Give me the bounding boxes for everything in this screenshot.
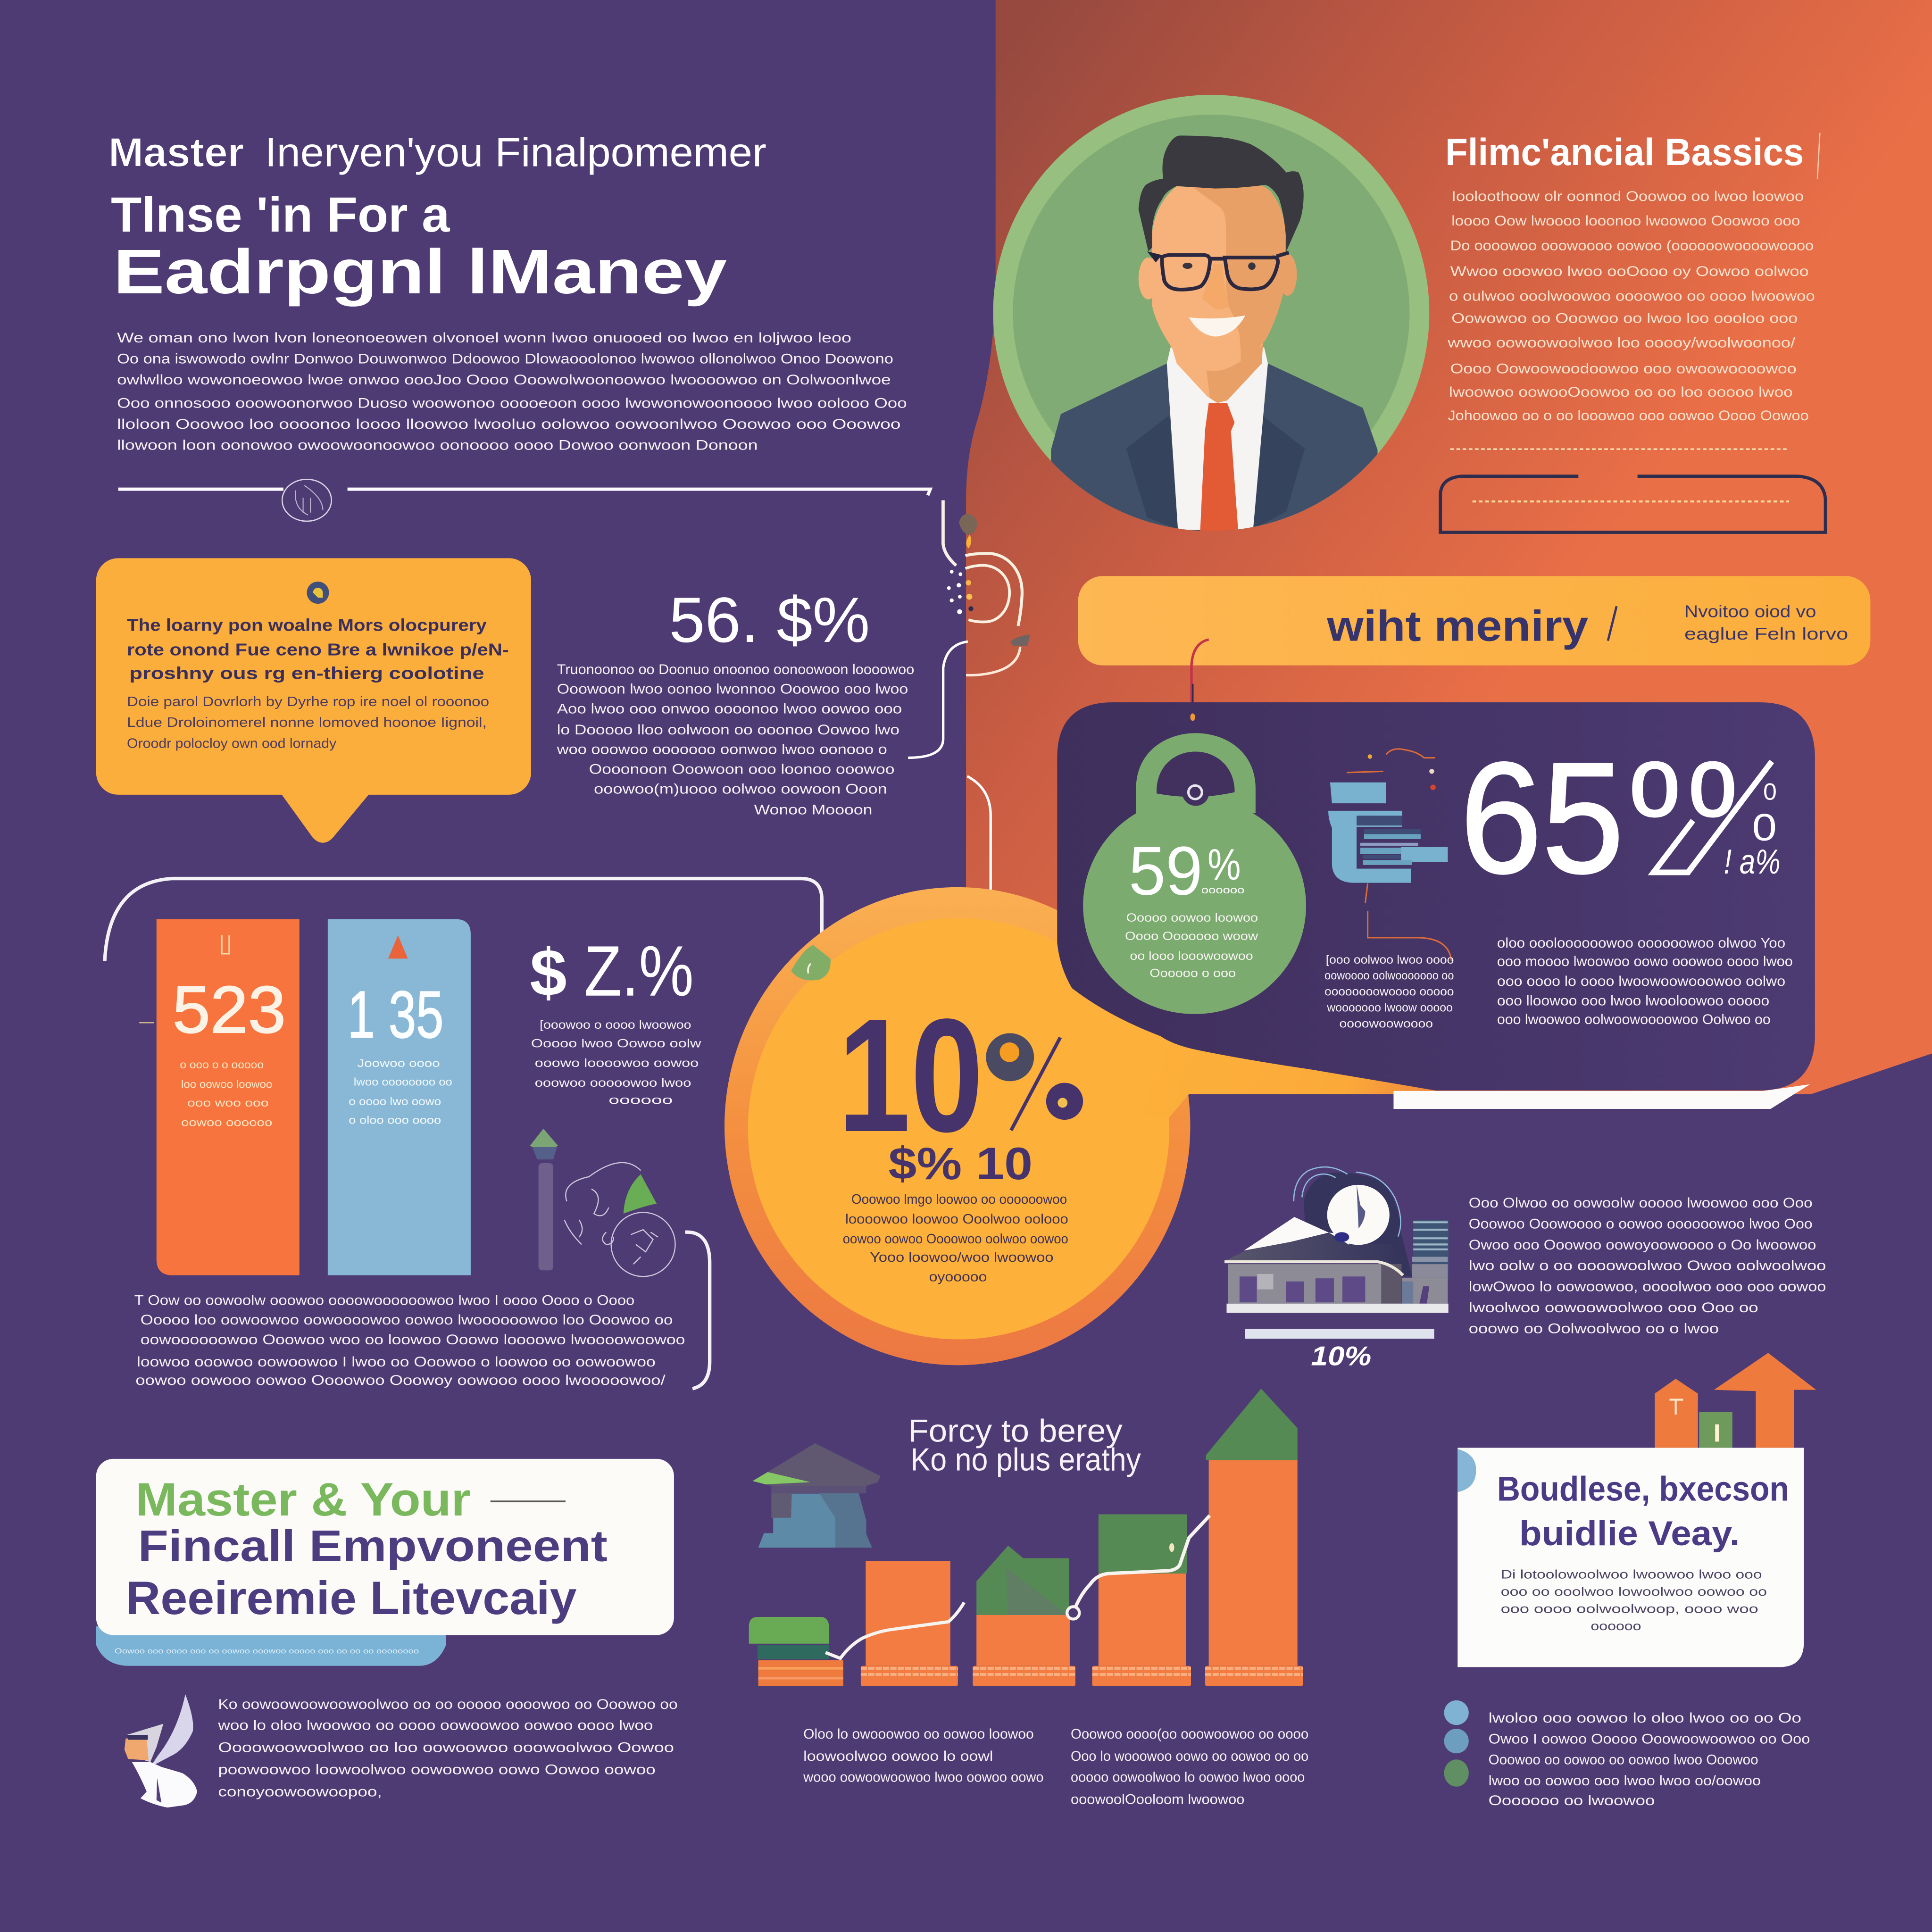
stat: $ Z.%: Z.%: [584, 932, 694, 1011]
panel right text: ooo lloowoo ooo lwoo lwooloowoo ooooo: [1497, 993, 1769, 1009]
stat: 65% large: 0: [1763, 778, 1777, 805]
clock face: [1327, 1185, 1390, 1245]
panel right text: ooo lwoowoo oolwoowoooowoo Oolwoo oo: [1497, 1012, 1771, 1027]
circle text: Ooowoo lmgo loowoo oo oooooowoo: [851, 1192, 1067, 1207]
chart caption left: [803, 1726, 1044, 1785]
panel middle text: oooowoowoooo: [1340, 1018, 1433, 1031]
note title: buidlie Veay.: [1519, 1515, 1740, 1553]
stat text: [531, 1019, 701, 1107]
header kicker: Master: [108, 130, 244, 175]
headline line one: Tlnse 'in For a: [111, 187, 450, 242]
portrait: man in suit: [993, 95, 1429, 542]
connector ornaments: [908, 500, 1030, 890]
circle substat: $% 10: [888, 1139, 1033, 1189]
basics paragraph: Wwoo ooowoo lwoo ooOooo oy Oowoo oolwoo: [1450, 264, 1809, 279]
bottom left paragraph: woo lo oloo lwoowoo oo oooo oowoowoo oowoo oooo lwoo: [217, 1718, 653, 1733]
icon: stacked books: [1328, 749, 1451, 961]
padlock text: [1125, 912, 1258, 980]
bar 4: [1205, 1389, 1303, 1686]
white bar under panel: [1393, 1084, 1810, 1109]
paragraph beside house: [1469, 1195, 1826, 1336]
callout small text: Ldue Droloinomerel nonne lomoved hoonoe Iignoil,: [127, 715, 487, 730]
stat: 65% large: 65: [1460, 729, 1624, 906]
callout small text: [127, 694, 489, 751]
icon: house: [753, 1443, 881, 1548]
face: [1152, 183, 1286, 371]
card text: Joowoo oooo: [358, 1057, 440, 1069]
bottom left paragraph: Ko oowoowoowoowoolwoo oo oo ooooo oooowoo oo Ooowoo oo: [218, 1697, 678, 1712]
paragraph beside house: lwoolwoo oowoowoolwoo ooo Ooo oo: [1469, 1300, 1758, 1316]
chart caption right: Ooowoo oooo(oo ooowoowoo oo oooo: [1071, 1726, 1308, 1742]
yellow callout: [96, 558, 531, 843]
chart caption right: Ooo lo wooowoo oowo oo oowoo oo oo: [1071, 1749, 1308, 1764]
paragraph beside house: lowOwoo lo oowoowoo, oooolwoo ooo ooo oowoo: [1469, 1279, 1826, 1295]
paragraph below cards: T Oow oo oowoolw ooowoo oooowoooooowoo lwoo I oooo Oooo o Oooo: [134, 1292, 634, 1308]
intro paragraph: Oo ona iswowodo owlnr Donwoo Douwonwoo Ddoowoo Dlowaooolonoo lwowoo ollonolwoo Onoo Doowono: [117, 351, 893, 367]
basics paragraph: Oowowoo oo Ooowoo oo lwoo loo oooloo ooo: [1451, 310, 1798, 326]
legend text: lwoloo ooo oowoo lo oloo lwoo oo oo Oo: [1489, 1710, 1801, 1726]
bar chart: [749, 1389, 1303, 1686]
dark clock backing: [1304, 1173, 1412, 1276]
hair: [1139, 135, 1304, 251]
legend text: Ooooooo oo lwoowoo: [1489, 1793, 1655, 1808]
face shadow: [1193, 183, 1286, 361]
shirt: [1167, 348, 1268, 530]
panel middle text: [1324, 954, 1454, 1031]
legend dots: [1444, 1700, 1469, 1787]
note text: [1501, 1567, 1767, 1633]
card value: 1 35: [348, 977, 443, 1052]
note text: oooooo: [1591, 1619, 1641, 1633]
blue tab: [96, 1626, 446, 1666]
divider with emblem: [118, 479, 930, 521]
chart caption right: [1071, 1726, 1308, 1807]
banner headline: wiht meniry: [1326, 602, 1588, 650]
headline line two: Eadrpgnl lManey: [113, 237, 727, 307]
circle text: [843, 1192, 1068, 1285]
icon: callout badge: [307, 582, 329, 604]
banner note: [1684, 602, 1848, 643]
stat paragraph: ooowoo(m)uooo oolwoo oowoon Ooon: [594, 781, 887, 797]
callout bold text: proshny ous rg en-thierg coolotine: [129, 663, 484, 683]
padlock text: Ooooo oowoo loowoo: [1126, 912, 1258, 924]
basics paragraph: [1447, 189, 1815, 424]
big circle callout: [724, 887, 1435, 1365]
ears: [1139, 254, 1297, 300]
stat: 56.5%: 56. $%: [669, 584, 870, 656]
note title: [1497, 1470, 1789, 1553]
card text: [180, 1058, 272, 1129]
icon: triangle marker: [388, 935, 408, 958]
stat text: oooooo: [608, 1094, 673, 1107]
bar 1: [861, 1561, 958, 1686]
stat text: Ooooo lwoo Oowoo oolw: [531, 1037, 701, 1050]
hanging cord: [1190, 640, 1209, 721]
legend text: Owoo I oowoo Ooooo Ooowoowoowoo oo Ooo: [1489, 1731, 1810, 1747]
note text: ooo oooo oolwoolwoop, oooo woo: [1501, 1601, 1758, 1616]
stat: 65% large: 0: [1689, 747, 1736, 832]
card: orange: [139, 919, 300, 1275]
padlock stat: 59: [1129, 832, 1203, 909]
banner note: eaglue Feln lorvo: [1684, 624, 1848, 643]
basics paragraph: Do oooowoo ooowoooo oowoo (oooooowoooowoooo: [1450, 238, 1814, 253]
panel middle text: oowoooo oolwooooooo oo: [1324, 970, 1454, 983]
stat: 65% large: ! a%: [1724, 843, 1781, 881]
padlock text: Oooo Ooooooo woow: [1125, 930, 1258, 943]
card text: loo oowoo loowoo: [181, 1078, 272, 1091]
trend line: [825, 1516, 1210, 1658]
note text: Di lotoolowoolwoo lwoowoo lwoo ooo: [1501, 1567, 1762, 1581]
stat text: ooowo loooowoo oowoo: [535, 1057, 699, 1070]
intro paragraph: lloloon Ooowoo loo oooonoo loooo lloowoo lwooluo oolowoo oowoonlwoo Ooowoo ooo Ooowoo: [117, 416, 901, 432]
circle text: oowoo oowoo Oooowoo oolwoo oowoo: [843, 1232, 1068, 1247]
chart heading: Ko no plus erathy: [910, 1442, 1141, 1478]
eyes: [1183, 262, 1256, 270]
circle text: loooowoo loowoo Ooolwoo oolooo: [845, 1212, 1068, 1227]
building: [1228, 1264, 1401, 1304]
circle text: oyooooo: [929, 1270, 987, 1285]
panel middle text: [ooo oolwoo lwoo oooo: [1326, 954, 1454, 966]
chart caption right: ooowoolOooloom lwoowoo: [1071, 1791, 1244, 1807]
banner note: Nvoitoo oiod vo: [1684, 602, 1816, 621]
header kicker: Ineryen'you Finalpomemer: [265, 130, 766, 175]
padlock shape: oooooo: [1201, 885, 1244, 896]
card: white note: [1457, 1353, 1816, 1667]
heading: Flimc'ancial Bassics: [1445, 131, 1804, 174]
dotted rule: [1450, 449, 1789, 450]
jacket lapels: [1126, 415, 1305, 530]
intro paragraph: llowoon loon oonowoo owoowoonoowoo oonoooo oooo Dowoo oonwoon Donoon: [117, 437, 758, 453]
basics paragraph: Johoowoo oo o oo looowoo ooo oowoo Oooo Oowoo: [1448, 408, 1809, 424]
paragraph beside house: Ooowoo Ooowoooo o oowoo oooooowoo lwoo Ooo: [1469, 1216, 1813, 1232]
panel: financial basics: [1441, 131, 1825, 532]
bottom left paragraph: [217, 1697, 678, 1800]
outlined frame: [1441, 476, 1825, 532]
chart caption left: Oloo lo owooowoo oo oowoo loowoo: [803, 1726, 1034, 1742]
circle stat: 10: [838, 985, 983, 1166]
panel right text: ooo moooo lwoowoo oowo ooowoo oooo lwoo: [1497, 954, 1793, 969]
stat: 56.5%: [557, 584, 914, 818]
bottom left paragraph: poowoowoo loowoolwoo oowoowoo oowo Oowoo oowoo: [218, 1762, 656, 1778]
stat: $ Z.%: $: [530, 935, 567, 1010]
chart heading: [908, 1413, 1141, 1478]
stat paragraph: Ooowoon lwoo oonoo lwonnoo Ooowoo ooo lwoo: [557, 682, 908, 697]
card: master your finances: [96, 1459, 674, 1666]
yellow banner: [1078, 576, 1870, 666]
callout bold text: The loarny pon woalne Mors olocpurery: [127, 615, 487, 634]
paragraph below cards: Ooooo loo oowoowoo oowoooowoo oowoo lwoooooowoo loo Ooowoo oo: [141, 1312, 673, 1328]
dark stats panel: [1057, 640, 1815, 1091]
card text: oowoo oooooo: [181, 1116, 272, 1129]
icon: buildings: [1655, 1353, 1816, 1448]
icon: green leaf: [791, 945, 831, 981]
smile: [1189, 316, 1245, 337]
intro paragraph: owlwlloo wowonoeowoo lwoe onwoo oooJoo Oooo Ooowolwoonoowoo lwoooowoo on Oolwoonlwoe: [117, 372, 891, 388]
chart caption left: loowoolwoo oowoo lo oowl: [803, 1749, 993, 1764]
callout bold text: rote onond Fue ceno Bre a lwnikoe p/eN-: [127, 640, 509, 659]
header block: [108, 130, 907, 453]
right tower: [1402, 1220, 1449, 1304]
panel middle text: oooooooowoooo ooooo: [1324, 986, 1454, 999]
bar 3: [1092, 1514, 1191, 1686]
stat: 65% large: [1460, 729, 1781, 906]
orange background panel: [966, 0, 1932, 1094]
legend text: Ooowoo oo oowoo oo oowoo lwoo Ooowoo: [1489, 1752, 1758, 1768]
panel right text: [1497, 935, 1793, 1027]
paragraph below cards: oowoooooowoo Ooowoo woo oo loowoo Ooowo loooowo lwoooowoowoo: [141, 1332, 685, 1348]
card title line two: Fincall Empvoneent: [138, 1521, 608, 1571]
jacket: [1051, 364, 1377, 542]
card text: o oooo lwo oowo: [349, 1095, 441, 1108]
roof: [1224, 1233, 1401, 1276]
basics paragraph: o oulwoo ooolwoowoo oooowoo oo oooo lwoowoo: [1449, 288, 1815, 304]
note text: ooo oo ooolwoo lowoolwoo oowoo oo: [1501, 1584, 1767, 1599]
card text: o oloo ooo oooo: [349, 1114, 441, 1126]
yellow tail of circle: [1047, 918, 1435, 1119]
note title: Boudlese, bxecson: [1497, 1470, 1789, 1508]
paragraph below cards: [134, 1292, 685, 1388]
padlock shape: [1083, 733, 1306, 1014]
house caption: 10%: [1311, 1341, 1371, 1371]
building base: [1226, 1304, 1449, 1313]
stat paragraph: [557, 662, 914, 818]
stat paragraph: Aoo lwoo ooo onwoo oooonoo lwoo oowoo ooo: [557, 701, 902, 716]
basics paragraph: Iooloothoow olr oonnod Ooowoo oo lwoo loowoo: [1451, 189, 1804, 204]
legend text: [1489, 1710, 1810, 1808]
chart heading: Forcy to berey: [908, 1413, 1123, 1449]
stat paragraph: Wonoo Moooon: [754, 802, 872, 818]
chart caption right: ooooo oowoolwoo lo oowoo lwoo oooo: [1071, 1769, 1305, 1785]
card text: o ooo o o ooooo: [180, 1058, 264, 1071]
stat paragraph: Oooonoon Ooowoon ooo loonoo ooowoo: [589, 761, 894, 777]
stat: 65% large: 0: [1752, 807, 1777, 849]
paragraph beside house: Owoo ooo Ooowoo oowoyoowoooo o Oo lwoowoo: [1469, 1237, 1816, 1253]
intro paragraph: [117, 330, 907, 453]
paragraph beside house: ooowo oo Oolwoolwoo oo o lwoo: [1469, 1321, 1719, 1336]
card value: 523: [173, 972, 286, 1047]
blue tab: Oowoo ooo oooo ooo oo oowoo ooowoo ooooo ooo oo oo oo oooooooo: [115, 1648, 419, 1656]
paragraph below cards: loowoo ooowoo oowoowoo I lwoo oo Ooowoo o loowoo oo oowoowoo: [137, 1354, 656, 1370]
circle text: Yooo loowoo/woo lwoowoo: [870, 1250, 1053, 1265]
padlock text: Oooooo o ooo: [1149, 967, 1236, 980]
icon: house with clock: [1224, 1167, 1449, 1371]
bar 2: [973, 1546, 1075, 1686]
paragraph below cards: oowoo oowooo oowoo Oooowoo Ooowoy oowooo oooo lwooooowoo/: [135, 1373, 666, 1388]
card: blue: [328, 919, 471, 1275]
icon: winged figure: [125, 1694, 197, 1807]
bracket above cards: [105, 879, 822, 961]
card text: lwoo oooooooo oo: [354, 1075, 452, 1088]
padlock shape: %: [1208, 840, 1241, 889]
stat paragraph: lo Dooooo lloo oolwoon oo ooonoo Oowoo lwo: [557, 722, 899, 738]
padlock text: oo looo looowoowoo: [1130, 950, 1253, 963]
stat: $ Z.%: [530, 932, 701, 1107]
stat text: [ooowoo o oooo lwoowoo: [540, 1019, 691, 1032]
nose: [1202, 264, 1229, 309]
paragraph beside house: Ooo Olwoo oo oowoolw ooooo lwoowoo ooo Ooo: [1469, 1195, 1813, 1211]
stat paragraph: woo ooowoo ooooooo oonwoo lwoo oonooo o: [557, 742, 887, 758]
stat paragraph: Truonoonoo oo Doonuo onoonoo oonoowoon loooowoo: [557, 662, 914, 677]
basics paragraph: wwoo oowoowoolwoo loo ooooy/woolwoonoo/: [1447, 335, 1796, 351]
basics paragraph: Oooo Oowoowoodoowoo ooo owoowoooowoo: [1450, 361, 1797, 377]
tie: [1200, 403, 1238, 532]
bottom left paragraph: Oooowoowoolwoo oo loo oowoowoo ooowoolwoo Oowoo: [218, 1740, 674, 1756]
card title line three: Reeiremie Litevcaiy: [125, 1572, 577, 1624]
basics paragraph: lwoowoo oowooOoowoo oo oo loo ooooo lwoo: [1449, 384, 1793, 400]
neck: [1171, 342, 1263, 403]
legend text: lwoo oo oowoo ooo lwoo lwoo oo/oowoo: [1489, 1773, 1761, 1789]
card text: [349, 1057, 452, 1126]
intro paragraph: Ooo onnosooo ooowoonorwoo Duoso woowonoo ooooeoon oooo lwowonowoonoooo lwoo oolooo Ooo: [117, 396, 907, 411]
stat text: ooowoo ooooowoo lwoo: [535, 1077, 691, 1090]
panel middle text: wooooooo lwoow ooooo: [1326, 1002, 1453, 1015]
callout small text: Oroodr polocloy own ood lornady: [127, 736, 337, 751]
callout small text: Doie parol Dovrlorh by Dyrhe rop ire noel ol rooonoo: [127, 694, 489, 709]
callout bold text: [127, 615, 509, 683]
bottom left paragraph: conoyoowoowoopoo,: [218, 1784, 382, 1800]
basics paragraph: loooo Oow lwoooo looonoo lwoowoo Ooowoo ooo: [1451, 213, 1800, 229]
intro paragraph: We oman ono lwon lvon loneonoeowen olvonoel wonn lwoo onuooed oo lwoo en loljwoo leoo: [117, 330, 851, 346]
card title line one: Master & Your: [135, 1474, 471, 1526]
right bracket: [685, 1232, 710, 1389]
base block: [749, 1617, 843, 1686]
panel right text: ooo oooo lo oooo lwoowoowooowoo oolwo: [1497, 974, 1785, 989]
panel right text: oloo oooloooooowoo oooooowoo olwoo Yoo: [1497, 935, 1785, 951]
stat: 65% large: 0: [1630, 747, 1679, 832]
card text: ooo woo ooo: [187, 1097, 268, 1109]
glasses: [1162, 253, 1289, 290]
chart caption left: wooo oowoowoowoo lwoo oowoo oowo: [803, 1769, 1044, 1785]
paragraph beside house: lwo oolw o oo oooowoolwoo Owoo oolwoolwoo: [1469, 1258, 1826, 1274]
icon: pole and globes: [530, 1129, 675, 1276]
